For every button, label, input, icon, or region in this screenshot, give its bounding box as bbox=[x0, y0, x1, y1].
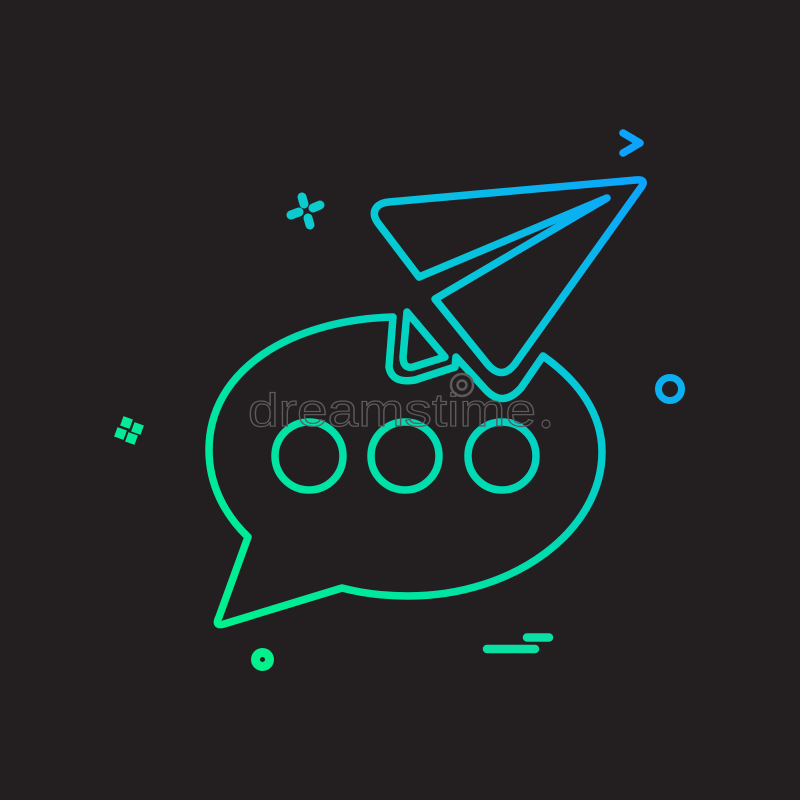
watermark bbox=[248, 374, 550, 436]
icon: sparkle cross bbox=[291, 197, 320, 225]
icon: dash lines bbox=[487, 638, 549, 649]
three dots in bubble bbox=[275, 422, 536, 490]
watermark: dreamstime bbox=[248, 384, 536, 436]
icon: checker diamond bbox=[114, 416, 144, 445]
icon: chevron bbox=[623, 133, 640, 153]
speech bubble bbox=[209, 317, 602, 625]
icon: blue ring bbox=[658, 378, 682, 400]
icon: green ring bbox=[256, 652, 270, 666]
icon: paper plane bbox=[374, 180, 643, 372]
plane tail fold bbox=[403, 312, 445, 367]
